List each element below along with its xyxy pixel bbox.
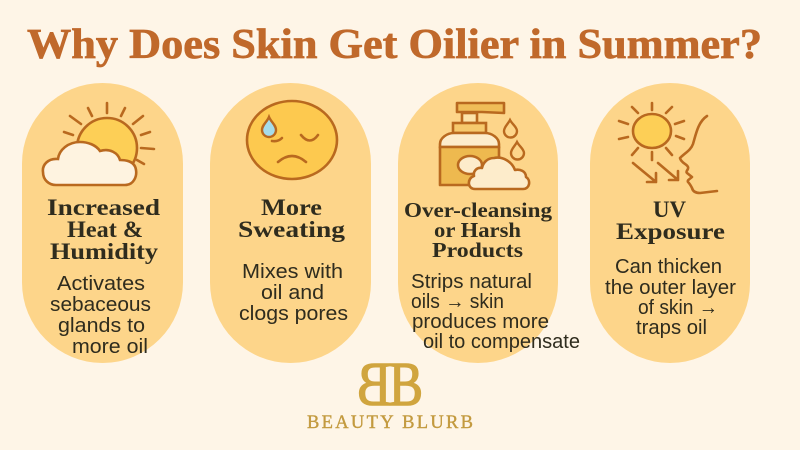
heading: more sweating: More <box>261 195 322 220</box>
text: strips natural oils: Strips natural <box>411 271 532 293</box>
icon: sweating sad face <box>247 101 337 179</box>
text: strips natural oils: oils → skin <box>411 291 504 313</box>
text: strips natural oils: produces more <box>412 311 549 333</box>
icon: mirrored BB monogram: B <box>389 351 423 419</box>
panel: increased heat and humidity <box>22 83 183 363</box>
heading: over-cleansing or harsh products: Products <box>432 238 523 262</box>
brand name: BEAUTY BLURB <box>307 413 473 433</box>
icon: mirrored BB monogram: B <box>357 351 391 419</box>
text: can thicken outer layer <box>605 256 736 339</box>
icon: sun behind cloud <box>43 103 154 185</box>
text: activates sebaceous glands <box>50 273 151 358</box>
icon: pump bottle with foam <box>440 103 529 189</box>
panel: uv exposure <box>590 83 750 363</box>
text: activates sebaceous glands: Activates <box>57 273 145 295</box>
logo: beauty blurb <box>307 351 473 433</box>
heading: over-cleansing or harsh products <box>404 198 553 262</box>
text: mixes with oil: oil and <box>261 282 324 304</box>
panel: more sweating <box>210 83 371 363</box>
text: can thicken outer layer: the outer layer <box>605 277 736 299</box>
heading: increased heat and humidity <box>47 195 160 264</box>
text: activates sebaceous glands: glands to <box>58 315 145 337</box>
text: mixes with oil: clogs pores <box>239 303 348 325</box>
text: can thicken outer layer: traps oil <box>636 317 707 339</box>
text: strips natural oils <box>411 271 580 353</box>
icon: sun rays on face profile <box>619 103 717 193</box>
text: mixes with oil <box>239 261 348 325</box>
heading: over-cleansing or harsh products: Over-cleansing <box>404 198 553 222</box>
heading: over-cleansing or harsh products: or Harsh <box>434 218 521 242</box>
icon: mirrored BB monogram <box>357 351 423 419</box>
text: mixes with oil: Mixes with <box>242 261 343 283</box>
text: can thicken outer layer: of skin → <box>638 297 718 319</box>
heading: more sweating: Sweating <box>238 217 346 242</box>
text: strips natural oils: oil to compensate <box>423 331 580 353</box>
heading: increased heat and humidity: Humidity <box>50 239 159 264</box>
heading: increased heat and humidity: Heat & <box>67 217 143 242</box>
text: activates sebaceous glands: sebaceous <box>50 294 151 316</box>
panel: over-cleansing <box>398 83 580 363</box>
heading: uv exposure: Exposure <box>616 219 725 244</box>
heading: increased heat and humidity: Increased <box>47 195 160 220</box>
heading: uv exposure: UV <box>653 197 686 222</box>
title: Why Does Skin Get Oilier in Summer? <box>27 22 762 68</box>
text: can thicken outer layer: Can thicken <box>615 256 722 278</box>
heading: more sweating <box>238 195 346 242</box>
text: activates sebaceous glands: more oil <box>72 336 148 358</box>
heading: uv exposure <box>616 197 725 244</box>
